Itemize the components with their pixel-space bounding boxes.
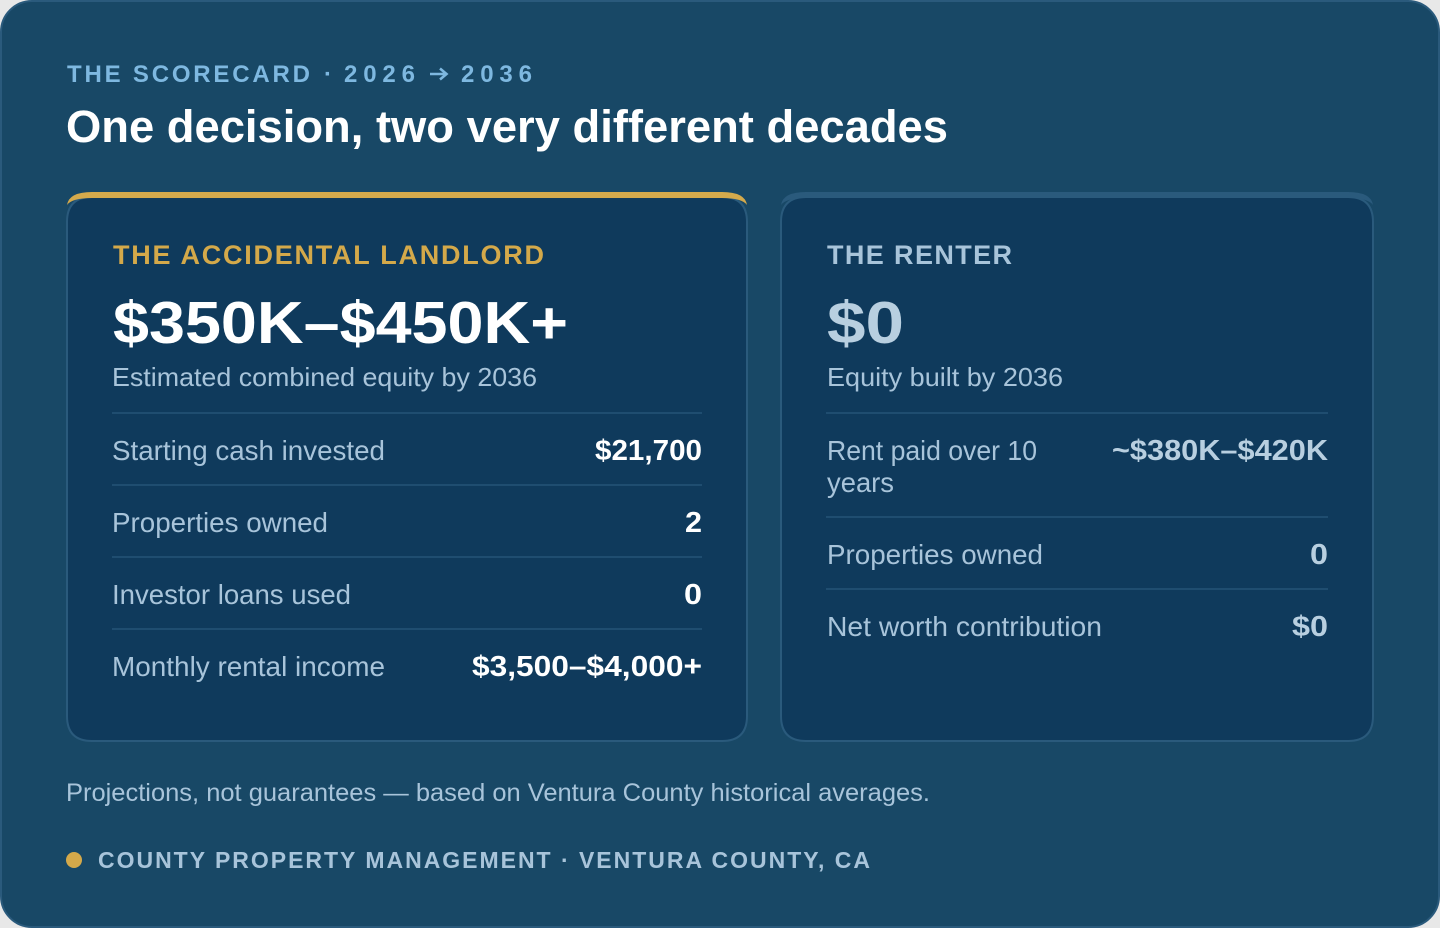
- headline figure: $0: [827, 290, 904, 356]
- icon: gold dot: [66, 852, 82, 868]
- row: properties owned: Properties owned: [112, 507, 328, 538]
- row: monthly rental income: [112, 651, 702, 683]
- panel: the renter: [781, 192, 1373, 741]
- row: net worth contribution: [827, 611, 1328, 643]
- row: properties owned: 2: [685, 507, 702, 539]
- row: properties owned: [827, 539, 1328, 571]
- headline caption: Equity built by 2036: [827, 362, 1063, 392]
- eyebrow: 2036: [461, 61, 532, 88]
- eyebrow: ·: [324, 61, 332, 88]
- headline figure: $350K–$450K+: [113, 290, 568, 356]
- row: investor loans used: 0: [684, 579, 702, 611]
- title: One decision, two very different decades: [66, 101, 948, 152]
- brand footer: [66, 847, 870, 873]
- row: starting cash invested: [112, 435, 702, 467]
- eyebrow: [67, 61, 532, 88]
- row: investor loans used: Investor loans used: [112, 579, 351, 610]
- card label: THE ACCIDENTAL LANDLORD: [113, 240, 544, 270]
- row: monthly rental income: Monthly rental income: [112, 651, 385, 682]
- brand line: COUNTY PROPERTY MANAGEMENT · VENTURA COUNTY, CA: [98, 847, 870, 873]
- row: rent paid: years: [827, 467, 894, 498]
- row: net worth contribution: $0: [1292, 611, 1328, 643]
- eyebrow: THE SCORECARD: [67, 61, 310, 88]
- row: rent paid: [827, 435, 1328, 498]
- row: rent paid: Rent paid over 10: [827, 435, 1037, 466]
- row: properties owned: 0: [1310, 539, 1328, 571]
- eyebrow: 2026: [344, 61, 415, 88]
- row: rent paid: ~$380K–$420K: [1112, 435, 1328, 467]
- row: investor loans used: [112, 579, 702, 611]
- panel: the accidental landlord: [67, 192, 747, 741]
- row: net worth contribution: Net worth contribution: [827, 611, 1102, 642]
- icon: arrow: [430, 68, 446, 80]
- row: starting cash invested: $21,700: [595, 435, 702, 467]
- row: properties owned: [112, 507, 702, 539]
- card background: [67, 192, 747, 741]
- row: monthly rental income: $3,500–$4,000+: [472, 651, 702, 683]
- row: properties owned: Properties owned: [827, 539, 1043, 570]
- row: starting cash invested: Starting cash invested: [112, 435, 385, 466]
- headline caption: Estimated combined equity by 2036: [112, 362, 537, 392]
- footnote: Projections, not guarantees — based on Ventura County historical averages.: [66, 779, 930, 807]
- card background: [781, 192, 1373, 741]
- card label: THE RENTER: [827, 240, 1012, 270]
